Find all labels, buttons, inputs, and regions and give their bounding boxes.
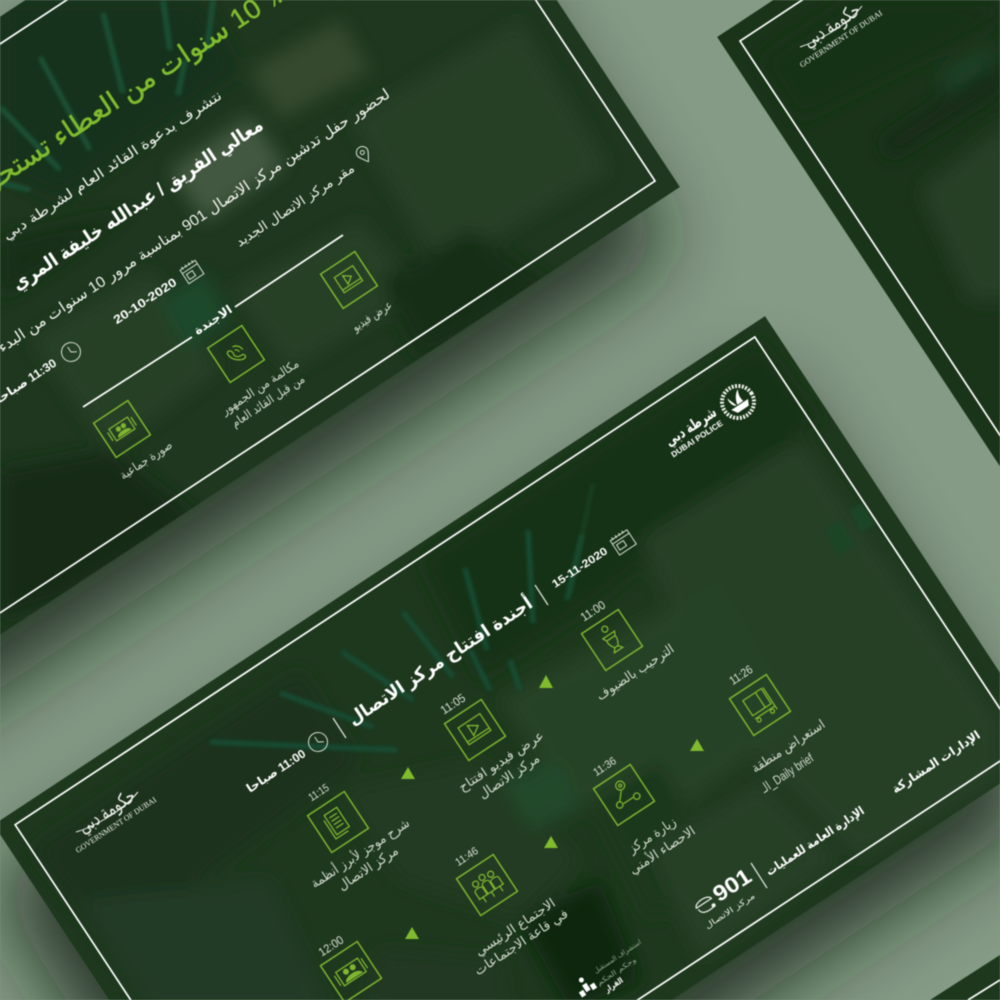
icon: phone box bbox=[208, 326, 264, 382]
panel: invitation card (upper left) bbox=[0, 0, 680, 695]
label: Daily brief_الـ bbox=[757, 750, 816, 796]
logo: Government of Dubai: GOVERNMENT OF DUBAI bbox=[74, 795, 158, 855]
agenda item 12:00 bbox=[316, 933, 381, 1000]
icon: calendar bbox=[609, 528, 636, 555]
label: استعراض منطقة bbox=[748, 716, 828, 776]
occasion line: لحضور حفل تدشين مركز الاتصال 901 بمناسبة مرور 10 سنوات من البدء bbox=[0, 86, 393, 356]
time: 11:15 bbox=[307, 782, 331, 804]
arabic wordmark: شرطة دبي bbox=[662, 404, 720, 450]
time: 12:00 bbox=[316, 933, 346, 959]
label: عرض فيديو bbox=[349, 298, 395, 336]
date: 20-10-2020 bbox=[111, 275, 180, 327]
card corner bbox=[930, 955, 1000, 1000]
label: الاحصاء الأمني bbox=[626, 822, 698, 877]
panel: cover card (upper right) bbox=[717, 0, 1000, 471]
agenda divider lines bbox=[83, 235, 343, 407]
icon: clock bbox=[305, 729, 331, 755]
logo: Government of Dubai: حكومة دبي bbox=[75, 786, 139, 838]
label: عرض فيديو افتتاح bbox=[456, 727, 547, 795]
white inner border bbox=[0, 0, 655, 670]
heading: أجندة افتتاح مركز الاتصال bbox=[343, 591, 537, 730]
agenda item 11:36 bbox=[591, 755, 698, 877]
logo: 901 call centre bbox=[694, 863, 757, 931]
header separators bbox=[333, 585, 548, 738]
panel: agenda card (center) bbox=[0, 316, 1000, 1000]
card background photo bbox=[0, 0, 680, 695]
icon: nodes box bbox=[594, 765, 654, 825]
time: 11:26 bbox=[727, 662, 756, 688]
agenda item 11:00 bbox=[578, 598, 677, 704]
logo: future foresight: وحكم الحكم bbox=[596, 956, 638, 987]
timeline arrows bbox=[401, 675, 704, 939]
label: الاجتماع الرئيسي bbox=[472, 895, 558, 960]
date: 15-11-2020 bbox=[550, 545, 610, 591]
agenda item 11:05 bbox=[438, 691, 547, 802]
icon: meeting box bbox=[457, 855, 517, 915]
icon: board box bbox=[730, 675, 790, 735]
logo: future foresight: استشراف المستقبل bbox=[593, 939, 643, 975]
panel: partial card (bottom right corner) bbox=[930, 955, 1000, 1000]
start time: 11:00 صباحا bbox=[244, 746, 309, 796]
icon: video box bbox=[321, 252, 377, 308]
agenda item 11:26 bbox=[727, 662, 828, 796]
card background photo bbox=[717, 0, 1000, 471]
venue line: مقر مركز الاتصال الجديد bbox=[233, 160, 358, 250]
invitation line: نتشرف بدعوة القائد العام لشرطة دبي bbox=[0, 87, 225, 244]
label: مكالمة من الجمهور bbox=[218, 356, 302, 419]
participating departments heading: الإدارات المشاركة bbox=[889, 728, 983, 796]
label: مركز الاتصال bbox=[335, 843, 401, 894]
white inner border bbox=[740, 0, 1000, 447]
icon: location pin bbox=[354, 144, 373, 165]
agenda item: video bbox=[321, 252, 395, 336]
general department label: الإدارة العامة للعمليات bbox=[763, 804, 867, 878]
time: 11:00 bbox=[578, 598, 608, 624]
logo: 901 call centre: 901 bbox=[708, 863, 756, 907]
agenda item: phone call bbox=[208, 326, 308, 431]
emblem bbox=[716, 380, 760, 424]
label: مركز الاتصال bbox=[476, 750, 543, 802]
card background photo bbox=[0, 316, 1000, 1000]
icon: clock bbox=[58, 339, 84, 365]
time: 11:05 bbox=[438, 691, 468, 717]
english wordmark: DUBAI POLICE bbox=[669, 418, 725, 459]
time: 11:36 bbox=[591, 755, 619, 779]
white inner border bbox=[968, 980, 1000, 1000]
label: صورة جماعية bbox=[117, 438, 175, 483]
label: زيارة مركز bbox=[625, 814, 679, 857]
icon: video box bbox=[445, 700, 505, 760]
icon: coffee pot box bbox=[582, 610, 642, 670]
icon: photo box bbox=[94, 401, 150, 457]
logo: 901 call centre: مركز الاتصال bbox=[703, 891, 757, 931]
agenda heading: الاجندة bbox=[191, 302, 235, 338]
label bbox=[748, 716, 828, 796]
label: الترحيب بالضيوف bbox=[593, 641, 677, 704]
label: شرح موجز لأبرز أنظمة bbox=[307, 814, 413, 892]
logo: Dubai Police bbox=[662, 380, 760, 459]
logo: future foresight: القرار bbox=[602, 976, 625, 995]
agenda item: group photo bbox=[94, 401, 175, 483]
logo: Government of Dubai: GOVERNMENT OF DUBAI bbox=[798, 8, 884, 69]
icon: calendar bbox=[179, 259, 204, 284]
agenda item 11:15 bbox=[307, 782, 413, 894]
time: 11:46 bbox=[453, 845, 481, 869]
label: من قبل القائد العام bbox=[229, 372, 308, 431]
icon: document box bbox=[308, 792, 368, 852]
agenda item 11:46 bbox=[453, 845, 571, 978]
guest name: معالي الفريق / عبدالله خليفة المري bbox=[9, 115, 268, 296]
icon: photo box bbox=[321, 942, 381, 1000]
white inner border bbox=[15, 337, 1000, 1000]
logo: future foresight bbox=[573, 939, 643, 997]
label: في قاعة الاجتماعات bbox=[471, 906, 571, 978]
footer separator bbox=[751, 863, 767, 888]
